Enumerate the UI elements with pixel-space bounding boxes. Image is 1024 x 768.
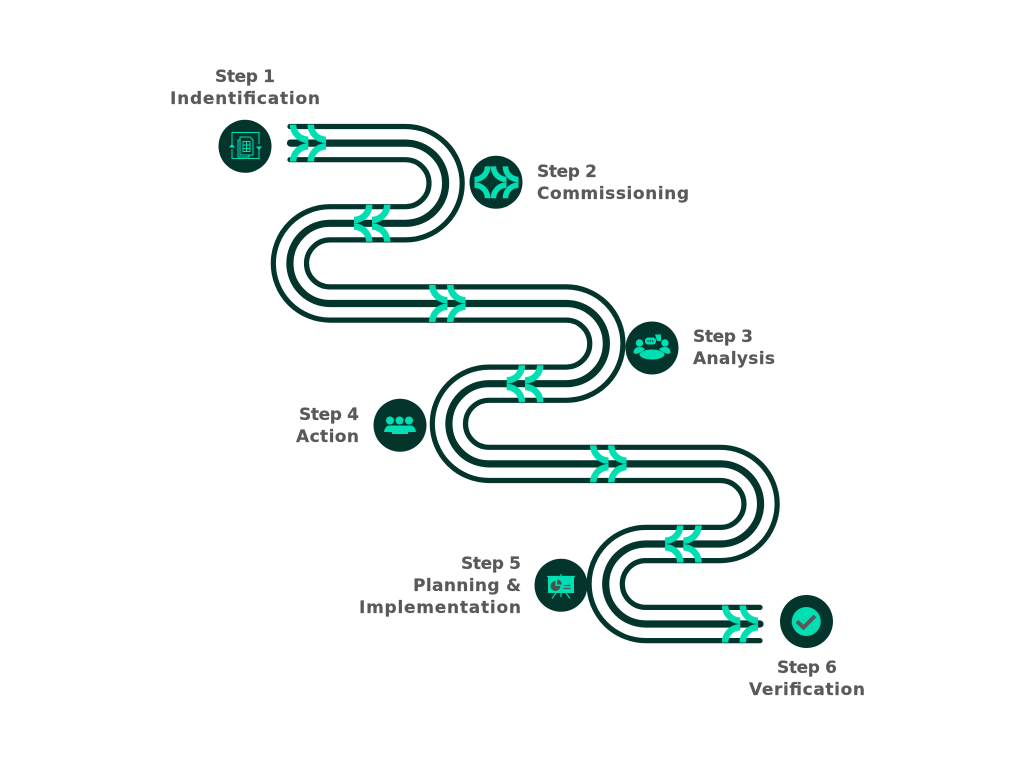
label: step 2 — [537, 162, 689, 204]
label: step 4 — [296, 405, 359, 447]
icon: meeting — [626, 322, 678, 374]
icon: team — [374, 399, 426, 452]
label: step 6 — [749, 658, 865, 700]
label: step 4: Action — [296, 427, 359, 447]
chevrons: fifth straight — [665, 526, 702, 562]
winding road — [273, 126, 777, 641]
label: step 1: Step 1 — [215, 67, 275, 87]
icon: presentation board — [534, 559, 588, 612]
chevrons: first bend — [354, 205, 390, 242]
icon: sparkle arcs — [470, 156, 522, 209]
label: step 5: Step 5 — [461, 554, 521, 574]
chevrons: second straight — [429, 285, 466, 322]
chevrons: third straight — [507, 365, 544, 402]
label: step 6: Step 6 — [777, 658, 837, 678]
label: step 6: Verification — [749, 680, 865, 700]
road outer edge A — [290, 126, 777, 607]
label: step 4: Step 4 — [299, 405, 359, 425]
label: step 3: Analysis — [693, 349, 775, 369]
label: step 3 — [693, 327, 775, 369]
road outer edge B — [273, 160, 760, 641]
label: step 5 — [359, 554, 521, 618]
chevrons: start — [290, 125, 326, 162]
label: step 3: Step 3 — [693, 327, 753, 347]
label: step 5: Implementation — [359, 598, 521, 618]
label: step 2: Step 2 — [537, 162, 597, 182]
label: step 2: Commissioning — [537, 184, 689, 204]
label: step 1 — [170, 67, 320, 109]
label: step 5: Planning & — [413, 576, 521, 596]
road centre line — [290, 143, 761, 624]
chevrons: fourth straight — [590, 445, 626, 482]
label: step 1: Indentification — [170, 89, 320, 109]
icon: check mark — [780, 595, 833, 648]
icon: document cycle — [218, 120, 272, 173]
chevrons: end — [722, 606, 758, 642]
